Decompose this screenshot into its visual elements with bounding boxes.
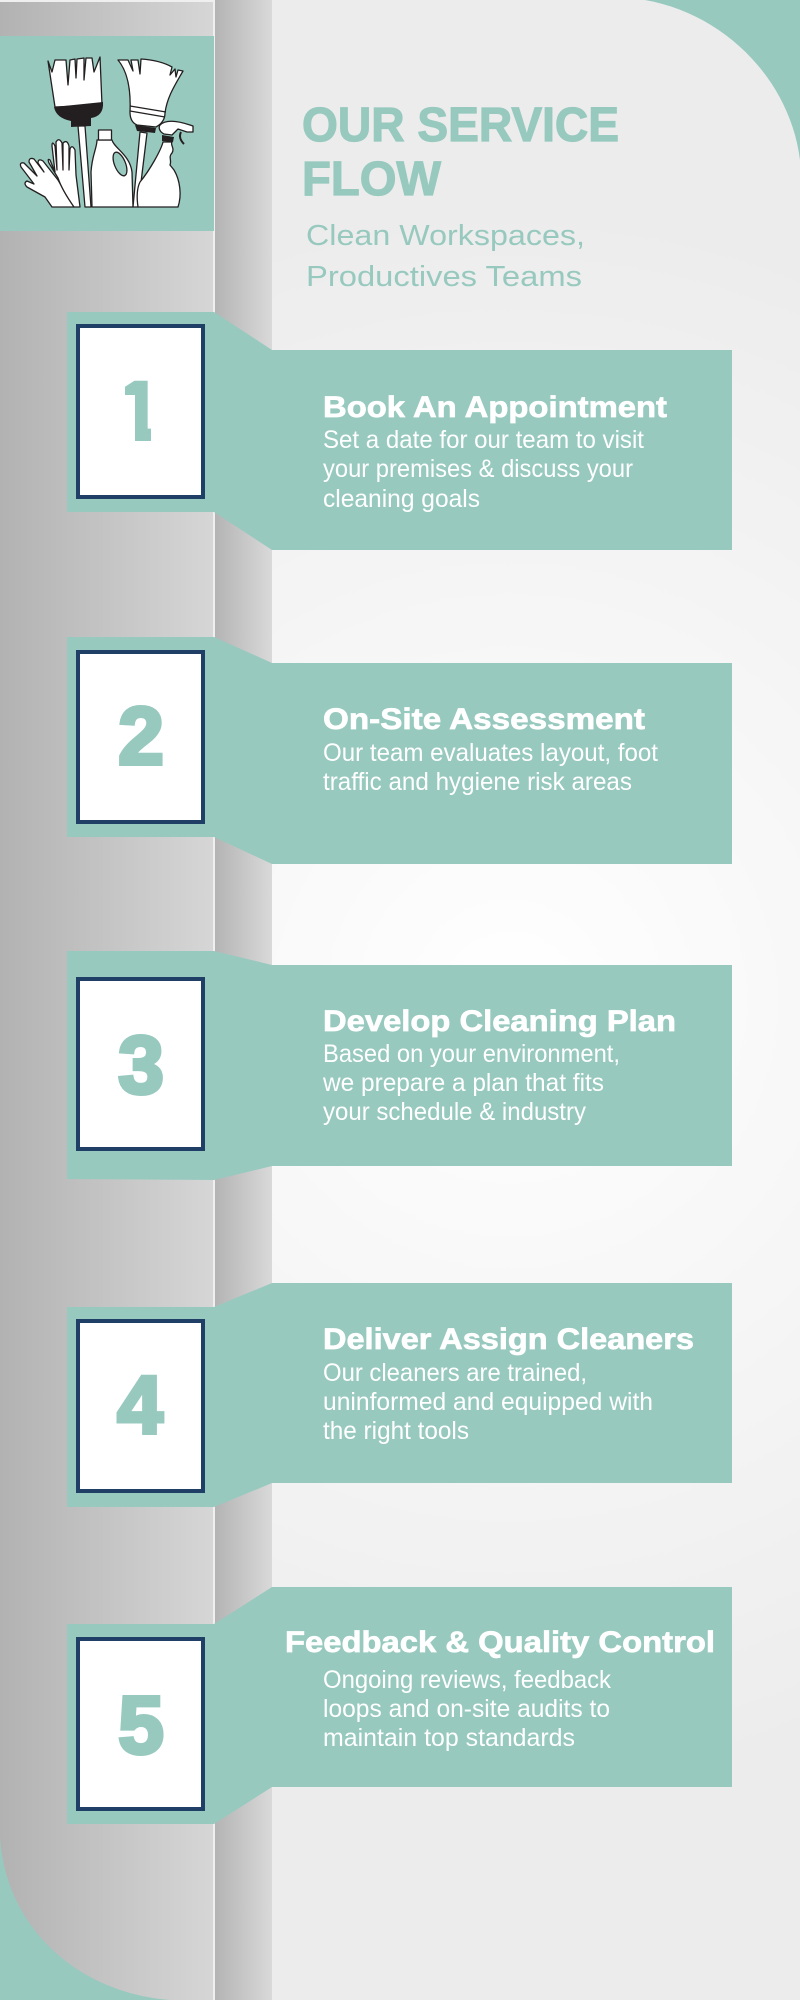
number box 5 — [78, 1639, 203, 1809]
number box 3 — [78, 979, 203, 1149]
panel: step 1 — [67, 312, 732, 550]
icon: cleaning tools — [20, 57, 193, 207]
panel: icon tile — [0, 36, 214, 231]
body 1: cleaning goals — [323, 485, 480, 513]
number box 3: 3 — [118, 1020, 164, 1111]
subtitle — [306, 220, 585, 293]
background: top-right teal corner — [645, 0, 800, 160]
body 4: Our cleaners are trained, — [323, 1359, 587, 1387]
heading 3: Develop Cleaning Plan — [323, 1005, 676, 1038]
body 5: maintain top standards — [323, 1724, 575, 1752]
title: FLOW — [302, 153, 442, 206]
heading 2: On-Site Assessment — [323, 703, 645, 736]
body 3: we prepare a plan that fits — [322, 1069, 604, 1097]
heading 4: Deliver Assign Cleaners — [323, 1323, 694, 1356]
panel: step 5 — [67, 1587, 732, 1824]
body 3 — [322, 1040, 620, 1126]
body 5: loops and on-site audits to — [323, 1695, 610, 1723]
body 2 — [323, 739, 658, 796]
body 3: your schedule & industry — [323, 1098, 586, 1126]
subtitle: Productives Teams — [306, 261, 582, 293]
subtitle: Clean Workspaces, — [306, 220, 585, 252]
panel: step 4 — [67, 1283, 732, 1507]
heading 5: Feedback & Quality Control — [285, 1626, 715, 1659]
number box 2: 2 — [118, 691, 164, 782]
heading 1: Book An Appointment — [323, 391, 667, 424]
background: right panel — [272, 0, 800, 2000]
number box 1: 1 — [115, 366, 161, 457]
body 1: Set a date for our team to visit — [323, 426, 644, 454]
body 1 — [323, 426, 644, 513]
title: OUR SERVICE — [302, 99, 619, 152]
body 4: uninformed and equipped with — [323, 1388, 653, 1416]
number box 1 — [78, 326, 203, 497]
number box 5: 5 — [118, 1680, 164, 1771]
body 3: Based on your environment, — [323, 1040, 620, 1068]
body 5: Ongoing reviews, feedback — [323, 1666, 611, 1694]
number box 4 — [78, 1321, 203, 1491]
body 2: Our team evaluates layout, foot — [323, 739, 658, 767]
number box 4: 4 — [117, 1360, 163, 1451]
body 1: your premises & discuss your — [323, 455, 633, 483]
background: fold band — [215, 0, 272, 2000]
number box 2 — [78, 652, 203, 822]
body 4 — [323, 1359, 653, 1445]
body 4: the right tools — [323, 1417, 469, 1445]
background: bottom-left teal corner — [0, 1837, 170, 2000]
body 2: traffic and hygiene risk areas — [323, 768, 632, 796]
body 5 — [323, 1666, 611, 1752]
background: left panel — [0, 0, 215, 2000]
panel: step 2 — [67, 637, 732, 864]
title — [302, 99, 619, 206]
panel: step 3 — [67, 951, 732, 1180]
